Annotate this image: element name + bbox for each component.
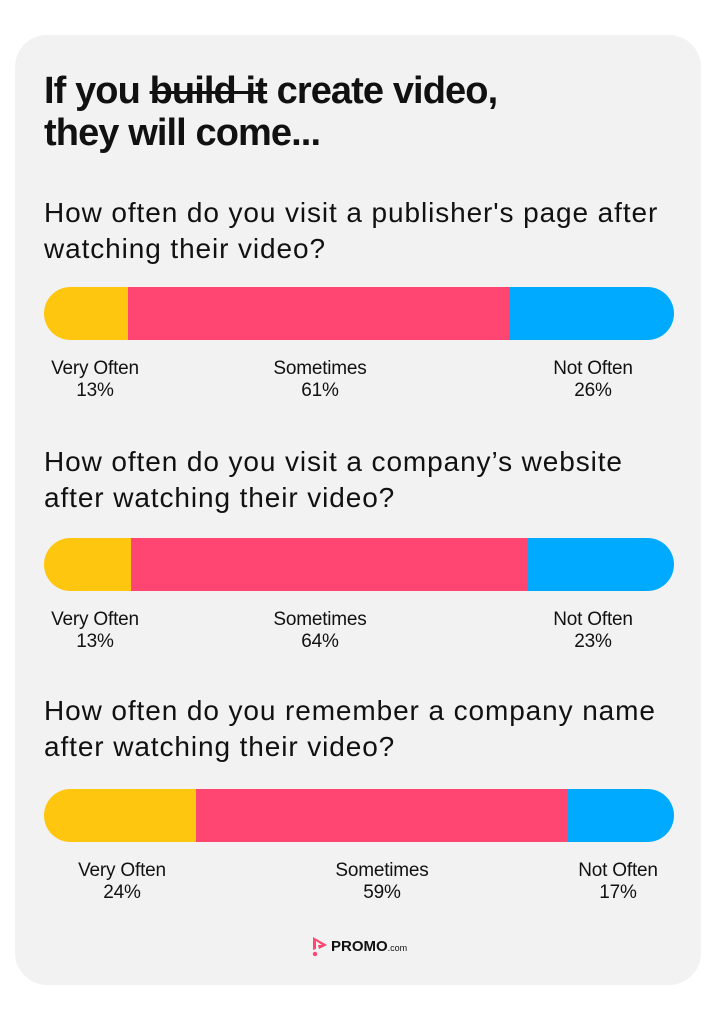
title [44, 70, 497, 154]
label: very often 1 [51, 358, 139, 401]
question 1: How often do you visit a publisher's page after [44, 197, 658, 228]
question 3 [44, 695, 656, 762]
label: sometimes 3: 59% [363, 882, 401, 903]
question 3: How often do you remember a company name [44, 695, 656, 726]
label: very often 1: Very Often [51, 358, 139, 379]
title: If you build it create video, [44, 70, 497, 112]
label: very often 2: Very Often [51, 609, 139, 630]
label: not often 1: 26% [574, 380, 612, 401]
title: they will come... [44, 112, 320, 154]
bar chart 3 [44, 789, 674, 842]
label: not often 2: Not Often [553, 609, 633, 630]
label: very often 2: 13% [76, 631, 114, 652]
question 2 [44, 446, 623, 513]
label: not often 3 [578, 860, 658, 903]
label: very often 2 [51, 609, 139, 652]
question 2: How often do you visit a company’s website [44, 446, 623, 477]
label: not often 3: 17% [599, 882, 637, 903]
label: sometimes 3 [335, 860, 429, 903]
question 1: watching their video? [44, 233, 326, 264]
question 1 [44, 197, 658, 264]
label: sometimes 1: 61% [301, 380, 339, 401]
label: sometimes 1 [273, 358, 367, 401]
label: not often 2: 23% [574, 631, 612, 652]
label: not often 2 [553, 609, 633, 652]
label: sometimes 2: 64% [301, 631, 339, 652]
label: very often 3 [78, 860, 166, 903]
label: not often 1 [553, 358, 633, 401]
label: very often 3: Very Often [78, 860, 166, 881]
label: sometimes 2: Sometimes [273, 609, 367, 630]
label: not often 3: Not Often [578, 860, 658, 881]
label: very often 1: 13% [76, 380, 114, 401]
label: sometimes 3: Sometimes [335, 860, 429, 881]
logo: promo.com: PROMO.com [331, 938, 407, 955]
label: sometimes 2 [273, 609, 367, 652]
label: sometimes 1: Sometimes [273, 358, 367, 379]
bar chart 2 [44, 538, 674, 591]
question 2: after watching their video? [44, 482, 395, 513]
question 3: after watching their video? [44, 731, 395, 762]
bar chart 1 [44, 287, 674, 340]
label: very often 3: 24% [103, 882, 141, 903]
label: not often 1: Not Often [553, 358, 633, 379]
